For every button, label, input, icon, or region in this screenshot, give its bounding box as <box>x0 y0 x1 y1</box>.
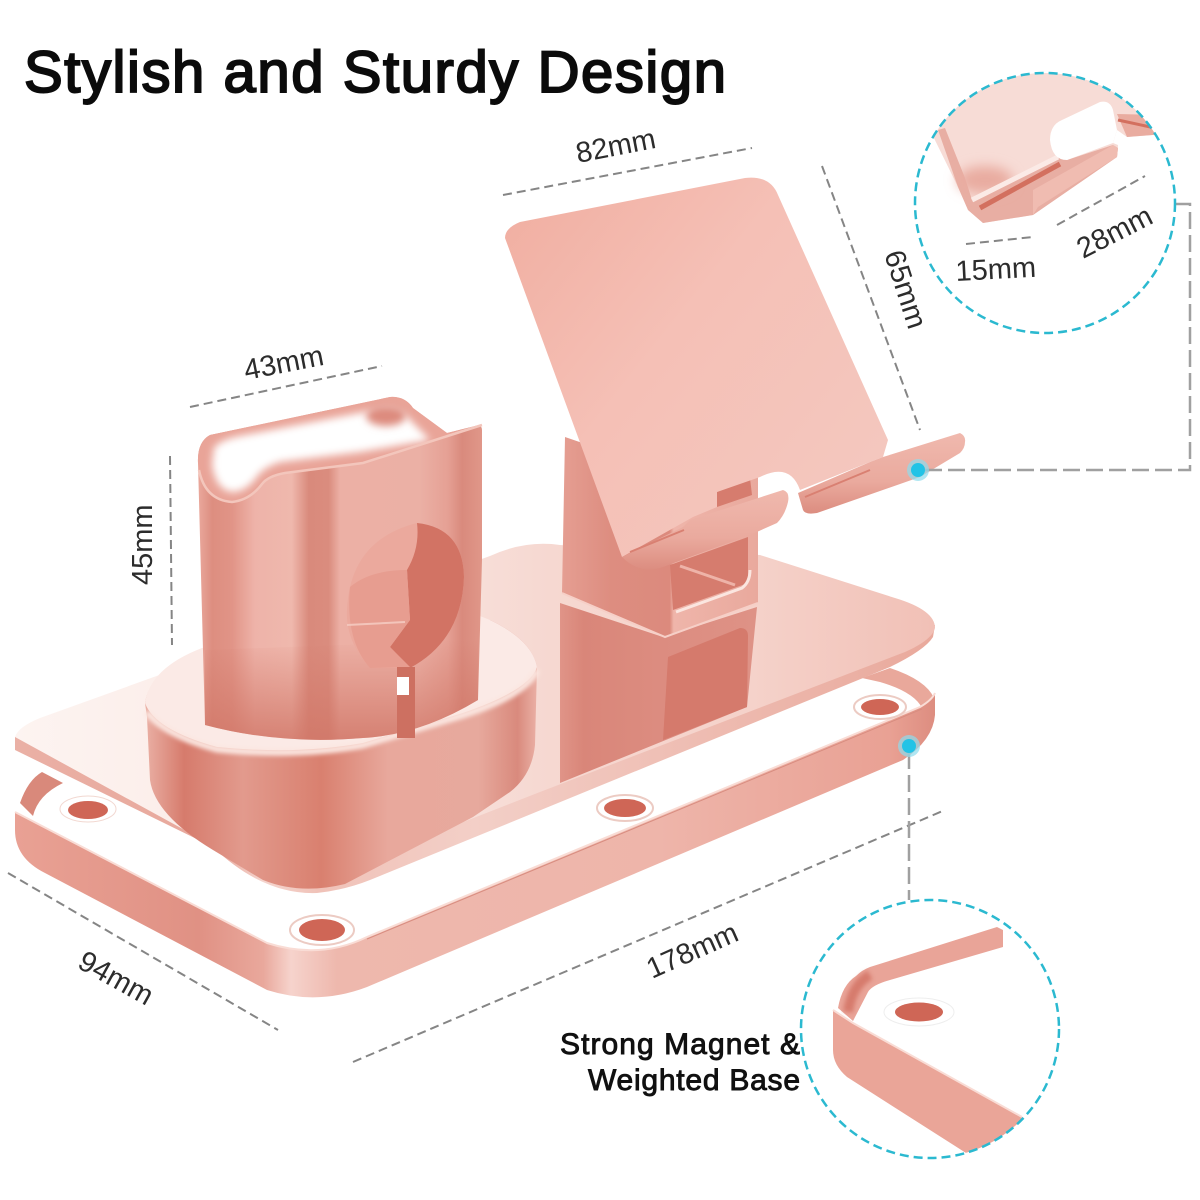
callout text <box>560 1028 800 1097</box>
base frame <box>15 668 935 997</box>
back plate <box>505 178 888 557</box>
dimension labels <box>73 123 1158 1012</box>
top plate <box>15 544 935 893</box>
title: Stylish and Sturdy Design <box>24 40 726 105</box>
callout: base corner detail <box>801 900 1059 1160</box>
watch stand <box>145 390 537 889</box>
dimension labels: 94mm <box>73 945 159 1012</box>
dimension labels: 65mm <box>877 246 933 333</box>
neck <box>562 437 758 637</box>
dimension labels: 15mm <box>955 252 1037 288</box>
marker: base <box>898 735 920 757</box>
magnet hole: centre <box>597 795 653 821</box>
marker: phone lip <box>907 459 929 481</box>
cable slot <box>670 478 752 612</box>
magnet hole: left <box>60 796 116 822</box>
dimension lines <box>8 148 1145 1062</box>
callout text: Weighted Base <box>588 1064 800 1097</box>
tower body <box>190 390 490 740</box>
watch cradle <box>347 523 464 738</box>
cradle lip: right <box>798 433 965 514</box>
oval pedestal <box>145 600 537 889</box>
dimension labels: 45mm <box>127 504 159 585</box>
dimension labels: 28mm <box>1072 200 1158 265</box>
cradle lip: left <box>622 490 788 569</box>
callout text: Strong Magnet & <box>560 1028 800 1061</box>
dimension labels: 43mm <box>241 340 326 387</box>
magnet hole: front <box>290 915 354 945</box>
dimension labels: 178mm <box>642 917 743 985</box>
magnet hole: right <box>854 695 906 719</box>
phone stand <box>505 178 965 637</box>
connector lines <box>909 204 1190 900</box>
plate reflection <box>560 603 757 783</box>
tower top surface <box>198 396 466 500</box>
callout: phone lip detail <box>915 60 1175 333</box>
dimension labels: 82mm <box>573 123 658 170</box>
